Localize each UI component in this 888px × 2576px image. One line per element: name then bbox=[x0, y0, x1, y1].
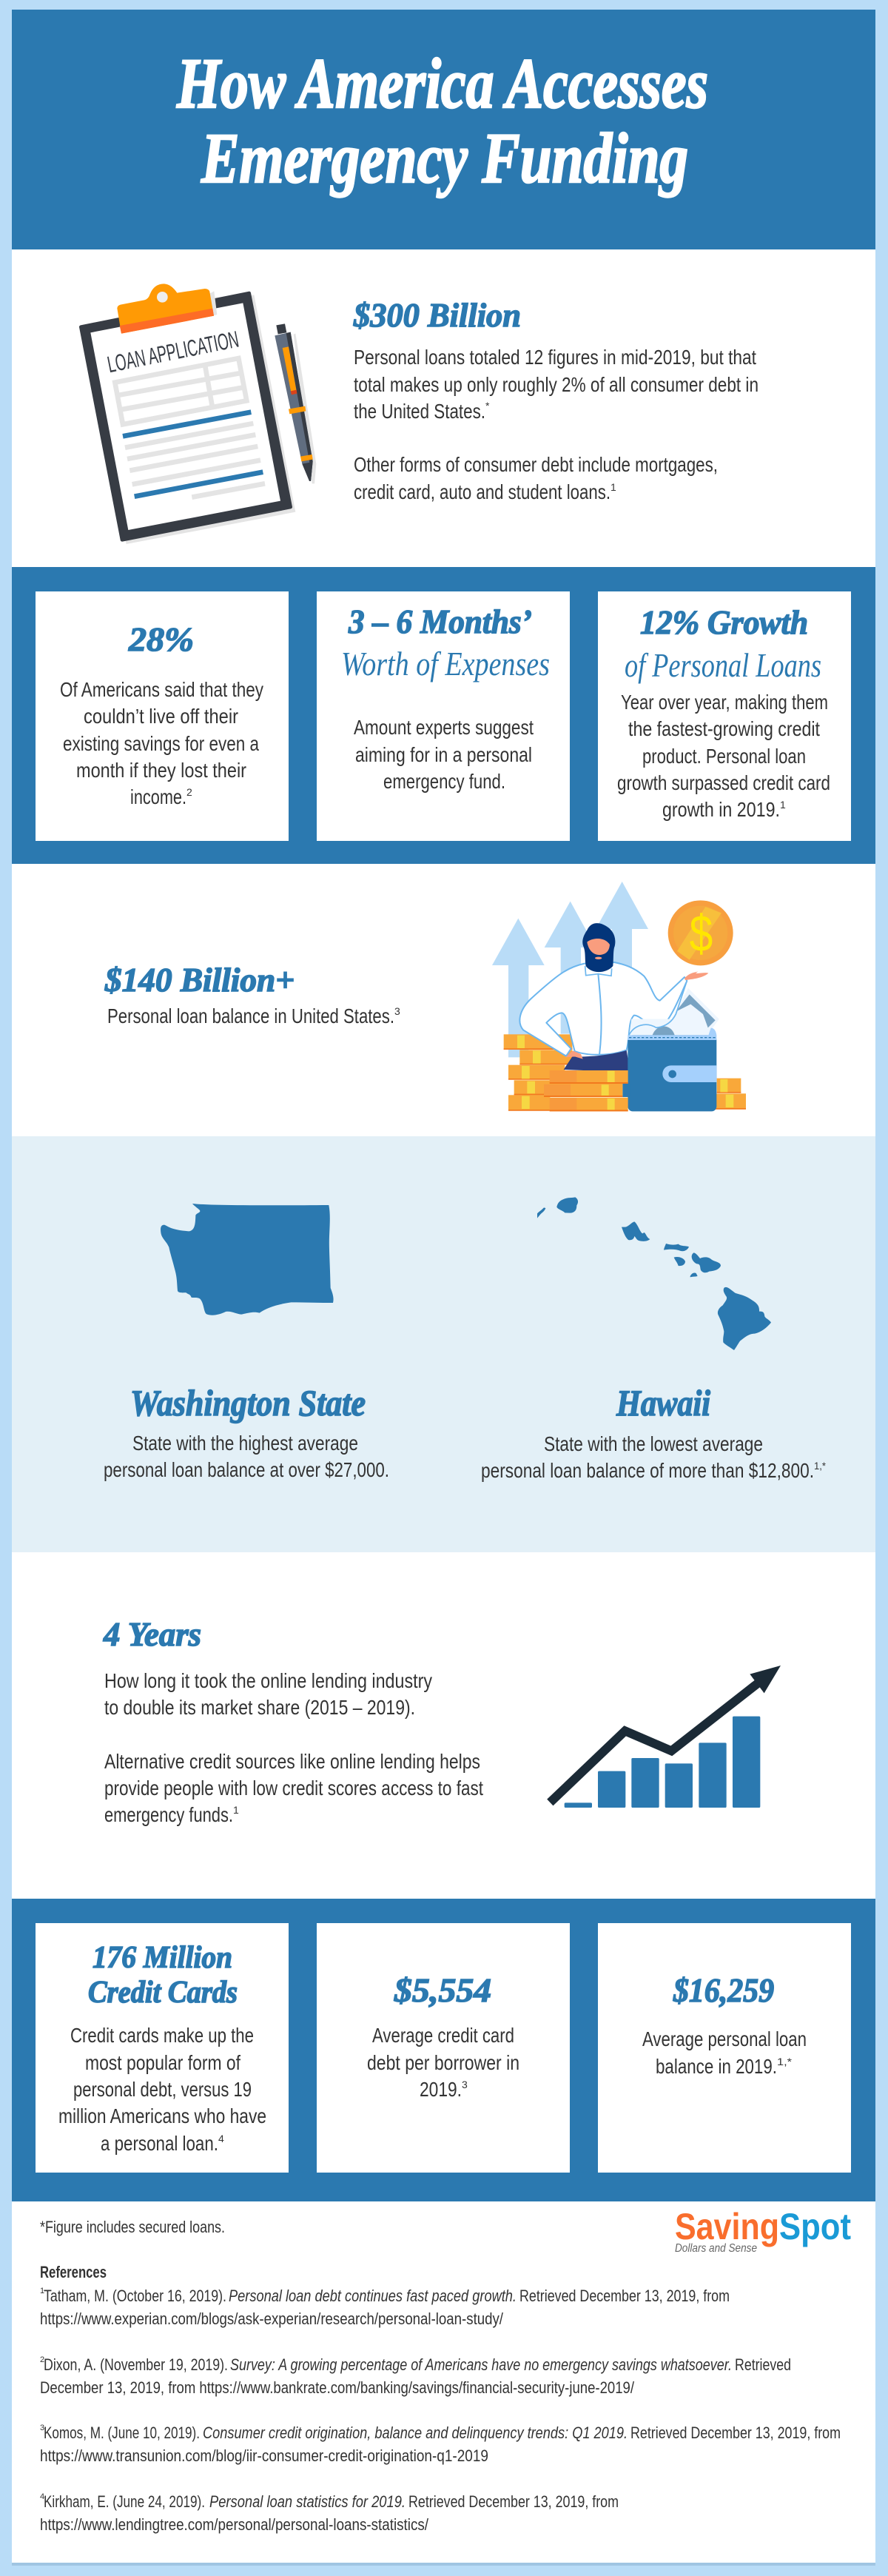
text block: personal loan balance: 3 bbox=[394, 1005, 400, 1017]
icon: man with wallet and coins: $ bbox=[690, 905, 713, 962]
heading: $140 Billion+: $140 Billion+ bbox=[104, 961, 295, 999]
reference 3 bbox=[40, 2424, 841, 2465]
card: 12% growth bbox=[598, 591, 851, 841]
panel: states bbox=[12, 1136, 875, 1552]
card: 3 – 6 months: emergency fund. bbox=[383, 770, 505, 793]
text block: Washington: State with the highest average bbox=[132, 1432, 358, 1455]
reference 1: 1 bbox=[40, 2287, 44, 2295]
text block: personal loans bbox=[354, 346, 758, 503]
card: 12% growth: growth surpassed credit card bbox=[617, 771, 830, 794]
text block: online lending: provide people with low credit scores access to fast bbox=[104, 1777, 483, 1799]
card: $5,554: 2019. bbox=[420, 2078, 462, 2101]
card: 12% growth: product. Personal loan bbox=[642, 745, 806, 768]
card: 176 million: 176 Million bbox=[92, 1941, 232, 1975]
reference 4: Kirkham, E. (June 24, 2019). bbox=[44, 2492, 205, 2511]
text block: personal loans: Other forms of consumer debt include mortgages, bbox=[354, 453, 718, 476]
text block: online lending: to double its market share (2015 – 2019). bbox=[104, 1696, 415, 1719]
reference 3: Retrieved December 13, 2019, from bbox=[630, 2424, 841, 2442]
logo: SavingSpot bbox=[675, 2206, 851, 2255]
text block: online lending bbox=[104, 1669, 483, 1826]
icon: man with wallet and coins bbox=[492, 882, 746, 1111]
reference 1: Tatham, M. (October 16, 2019). bbox=[44, 2287, 226, 2305]
reference 1 bbox=[40, 2287, 730, 2328]
logo: SavingSpot: Saving bbox=[675, 2206, 779, 2247]
reference 4: Retrieved December 13, 2019, from bbox=[408, 2492, 619, 2511]
reference 2: Survey: A growing percentage of Americans have no emergency savings whatsoever. bbox=[230, 2355, 732, 2374]
text block: online lending: emergency funds. bbox=[104, 1803, 233, 1826]
card: 12% growth: Year over year, making them bbox=[621, 691, 828, 714]
text block: online lending: 1 bbox=[233, 1804, 239, 1816]
text block: personal loans: Personal loans totaled 12 figures in mid-2019, but that bbox=[354, 346, 756, 369]
title: How America Accesses bbox=[176, 44, 708, 123]
header panel bbox=[12, 10, 875, 249]
card: $16,259: balance in 2019. bbox=[656, 2055, 777, 2078]
card: $16,259: 1,* bbox=[777, 2056, 793, 2067]
panel: 300 billion bbox=[12, 249, 875, 567]
panel: footer bbox=[12, 2201, 875, 2563]
text block: online lending: Alternative credit sources like online lending helps bbox=[104, 1750, 480, 1773]
card: 3 – 6 months: Worth of Expenses bbox=[341, 645, 550, 682]
icon: loan application clipboard bbox=[81, 284, 316, 544]
card: 28%: month if they lost their bbox=[76, 759, 246, 782]
title bbox=[176, 44, 708, 198]
card: $16,259: $16,259 bbox=[673, 1971, 774, 2009]
card: 3 – 6 months: aiming for in a personal bbox=[355, 743, 532, 766]
text block: online lending: How long it took the online lending industry bbox=[104, 1669, 432, 1692]
card: 28%: 28% bbox=[128, 620, 194, 658]
reference 2: December 13, 2019, from https://www.bankrate.com/banking/savings/financial-security-june-2019/ bbox=[40, 2378, 635, 2397]
card: 176 million: personal debt, versus 19 bbox=[73, 2078, 252, 2101]
reference 2: Dixon, A. (November 19, 2019). bbox=[44, 2355, 228, 2374]
reference 4: Personal loan statistics for 2019. bbox=[209, 2492, 406, 2511]
card: 176 million: a personal loan. bbox=[101, 2132, 218, 2155]
card: 176 million: Credit Cards bbox=[88, 1976, 238, 2010]
heading: 4 Years: 4 Years bbox=[103, 1615, 201, 1653]
reference 1: Retrieved December 13, 2019, from bbox=[519, 2287, 730, 2305]
card: 28%: Of Americans said that they bbox=[60, 678, 263, 701]
reference 3: https://www.transunion.com/blog/iir-consumer-credit-origination-q1-2019 bbox=[40, 2446, 488, 2465]
card: 176 million bbox=[36, 1923, 289, 2173]
card: 12% growth: 1 bbox=[780, 799, 786, 811]
text block: personal loans: total makes up only roughly 2% of all consumer debt in bbox=[354, 373, 758, 396]
heading: References: References bbox=[40, 2263, 107, 2281]
text block: Hawaii bbox=[481, 1432, 827, 1482]
text block: Hawaii: personal loan balance of more than $12,800. bbox=[481, 1459, 814, 1482]
heading: Hawaii: Hawaii bbox=[616, 1382, 710, 1423]
reference 1: Personal loan debt continues fast paced growth. bbox=[229, 2287, 517, 2305]
card: 3 – 6 months bbox=[317, 591, 570, 841]
card: $5,554: 3 bbox=[462, 2079, 468, 2090]
text block: Washington bbox=[104, 1432, 389, 1481]
card: 28%: 2 bbox=[186, 786, 192, 798]
card: 3 – 6 months: 3 – 6 Months’ bbox=[348, 603, 532, 640]
card: 28%: existing savings for even a bbox=[63, 732, 259, 755]
map: Hawaii bbox=[537, 1197, 771, 1350]
panel: credit stat cards bbox=[12, 1899, 875, 2201]
reference 4 bbox=[40, 2492, 619, 2534]
footnote: *Figure includes secured loans. bbox=[40, 2218, 225, 2236]
reference 2: 2 bbox=[40, 2355, 44, 2364]
card: 12% growth: 12% Growth bbox=[640, 603, 808, 641]
card: 12% growth: the fastest-growing credit bbox=[628, 717, 820, 740]
card: $5,554: $5,554 bbox=[394, 1971, 491, 2009]
reference 2: Retrieved bbox=[735, 2355, 791, 2374]
card: $5,554 bbox=[317, 1923, 570, 2173]
card: 28%: income. bbox=[130, 785, 186, 808]
card: $5,554: debt per borrower in bbox=[367, 2051, 519, 2074]
reference 4: https://www.lendingtree.com/personal/personal-loans-statistics/ bbox=[40, 2515, 429, 2534]
text block: Hawaii: State with the lowest average bbox=[544, 1432, 763, 1455]
reference 3: 3 bbox=[40, 2424, 44, 2432]
card: $16,259: Average personal loan bbox=[642, 2027, 807, 2050]
panel: 4 years bbox=[12, 1552, 875, 1899]
text block: Hawaii: 1,* bbox=[814, 1460, 827, 1472]
map: Washington state bbox=[161, 1204, 334, 1315]
text block: personal loans: credit card, auto and student loans. bbox=[354, 480, 610, 503]
text block: Washington: personal loan balance at over $27,000. bbox=[104, 1458, 389, 1481]
panel: three stat cards bbox=[12, 567, 875, 864]
reference 3: Consumer credit origination, balance and delinquency trends: Q1 2019. bbox=[203, 2424, 628, 2442]
title: Emergency Funding bbox=[201, 118, 688, 198]
icon: loan application clipboard: LOAN APPLICATION bbox=[105, 326, 241, 378]
heading: Washington State: Washington State bbox=[130, 1382, 366, 1423]
card: 176 million: 4 bbox=[218, 2133, 224, 2144]
card: 176 million: most popular form of bbox=[85, 2051, 240, 2074]
reference 1: https://www.experian.com/blogs/ask-experian/research/personal-loan-study/ bbox=[40, 2310, 504, 2328]
card: 28% bbox=[36, 591, 289, 841]
text block: personal loan balance: Personal loan balance in United States. bbox=[107, 1004, 394, 1027]
card: 12% growth: of Personal Loans bbox=[625, 646, 821, 684]
card: 176 million: million Americans who have bbox=[58, 2104, 266, 2127]
heading: $300 Billion: $300 Billion bbox=[353, 296, 521, 334]
logo: SavingSpot: Dollars and Sense bbox=[675, 2242, 757, 2255]
text block: personal loans: 1 bbox=[610, 481, 616, 493]
panel: 140 billion bbox=[12, 864, 875, 1136]
card: $16,259 bbox=[598, 1923, 851, 2173]
reference 4: 4 bbox=[40, 2492, 44, 2501]
card: 12% growth: growth in 2019. bbox=[662, 798, 780, 821]
card: 28%: couldn’t live off their bbox=[84, 705, 238, 728]
chart: rising bars and arrow bbox=[550, 1666, 781, 1808]
card: 176 million: Credit cards make up the bbox=[70, 2024, 254, 2047]
card: $5,554: Average credit card bbox=[372, 2024, 514, 2047]
logo: SavingSpot: Spot bbox=[779, 2206, 851, 2247]
card: 3 – 6 months: Amount experts suggest bbox=[354, 716, 534, 739]
text block: personal loans: the United States. bbox=[354, 400, 485, 423]
reference 2 bbox=[40, 2355, 791, 2397]
text block: personal loans: * bbox=[485, 400, 490, 412]
reference 3: Komos, M. (June 10, 2019). bbox=[44, 2424, 200, 2442]
